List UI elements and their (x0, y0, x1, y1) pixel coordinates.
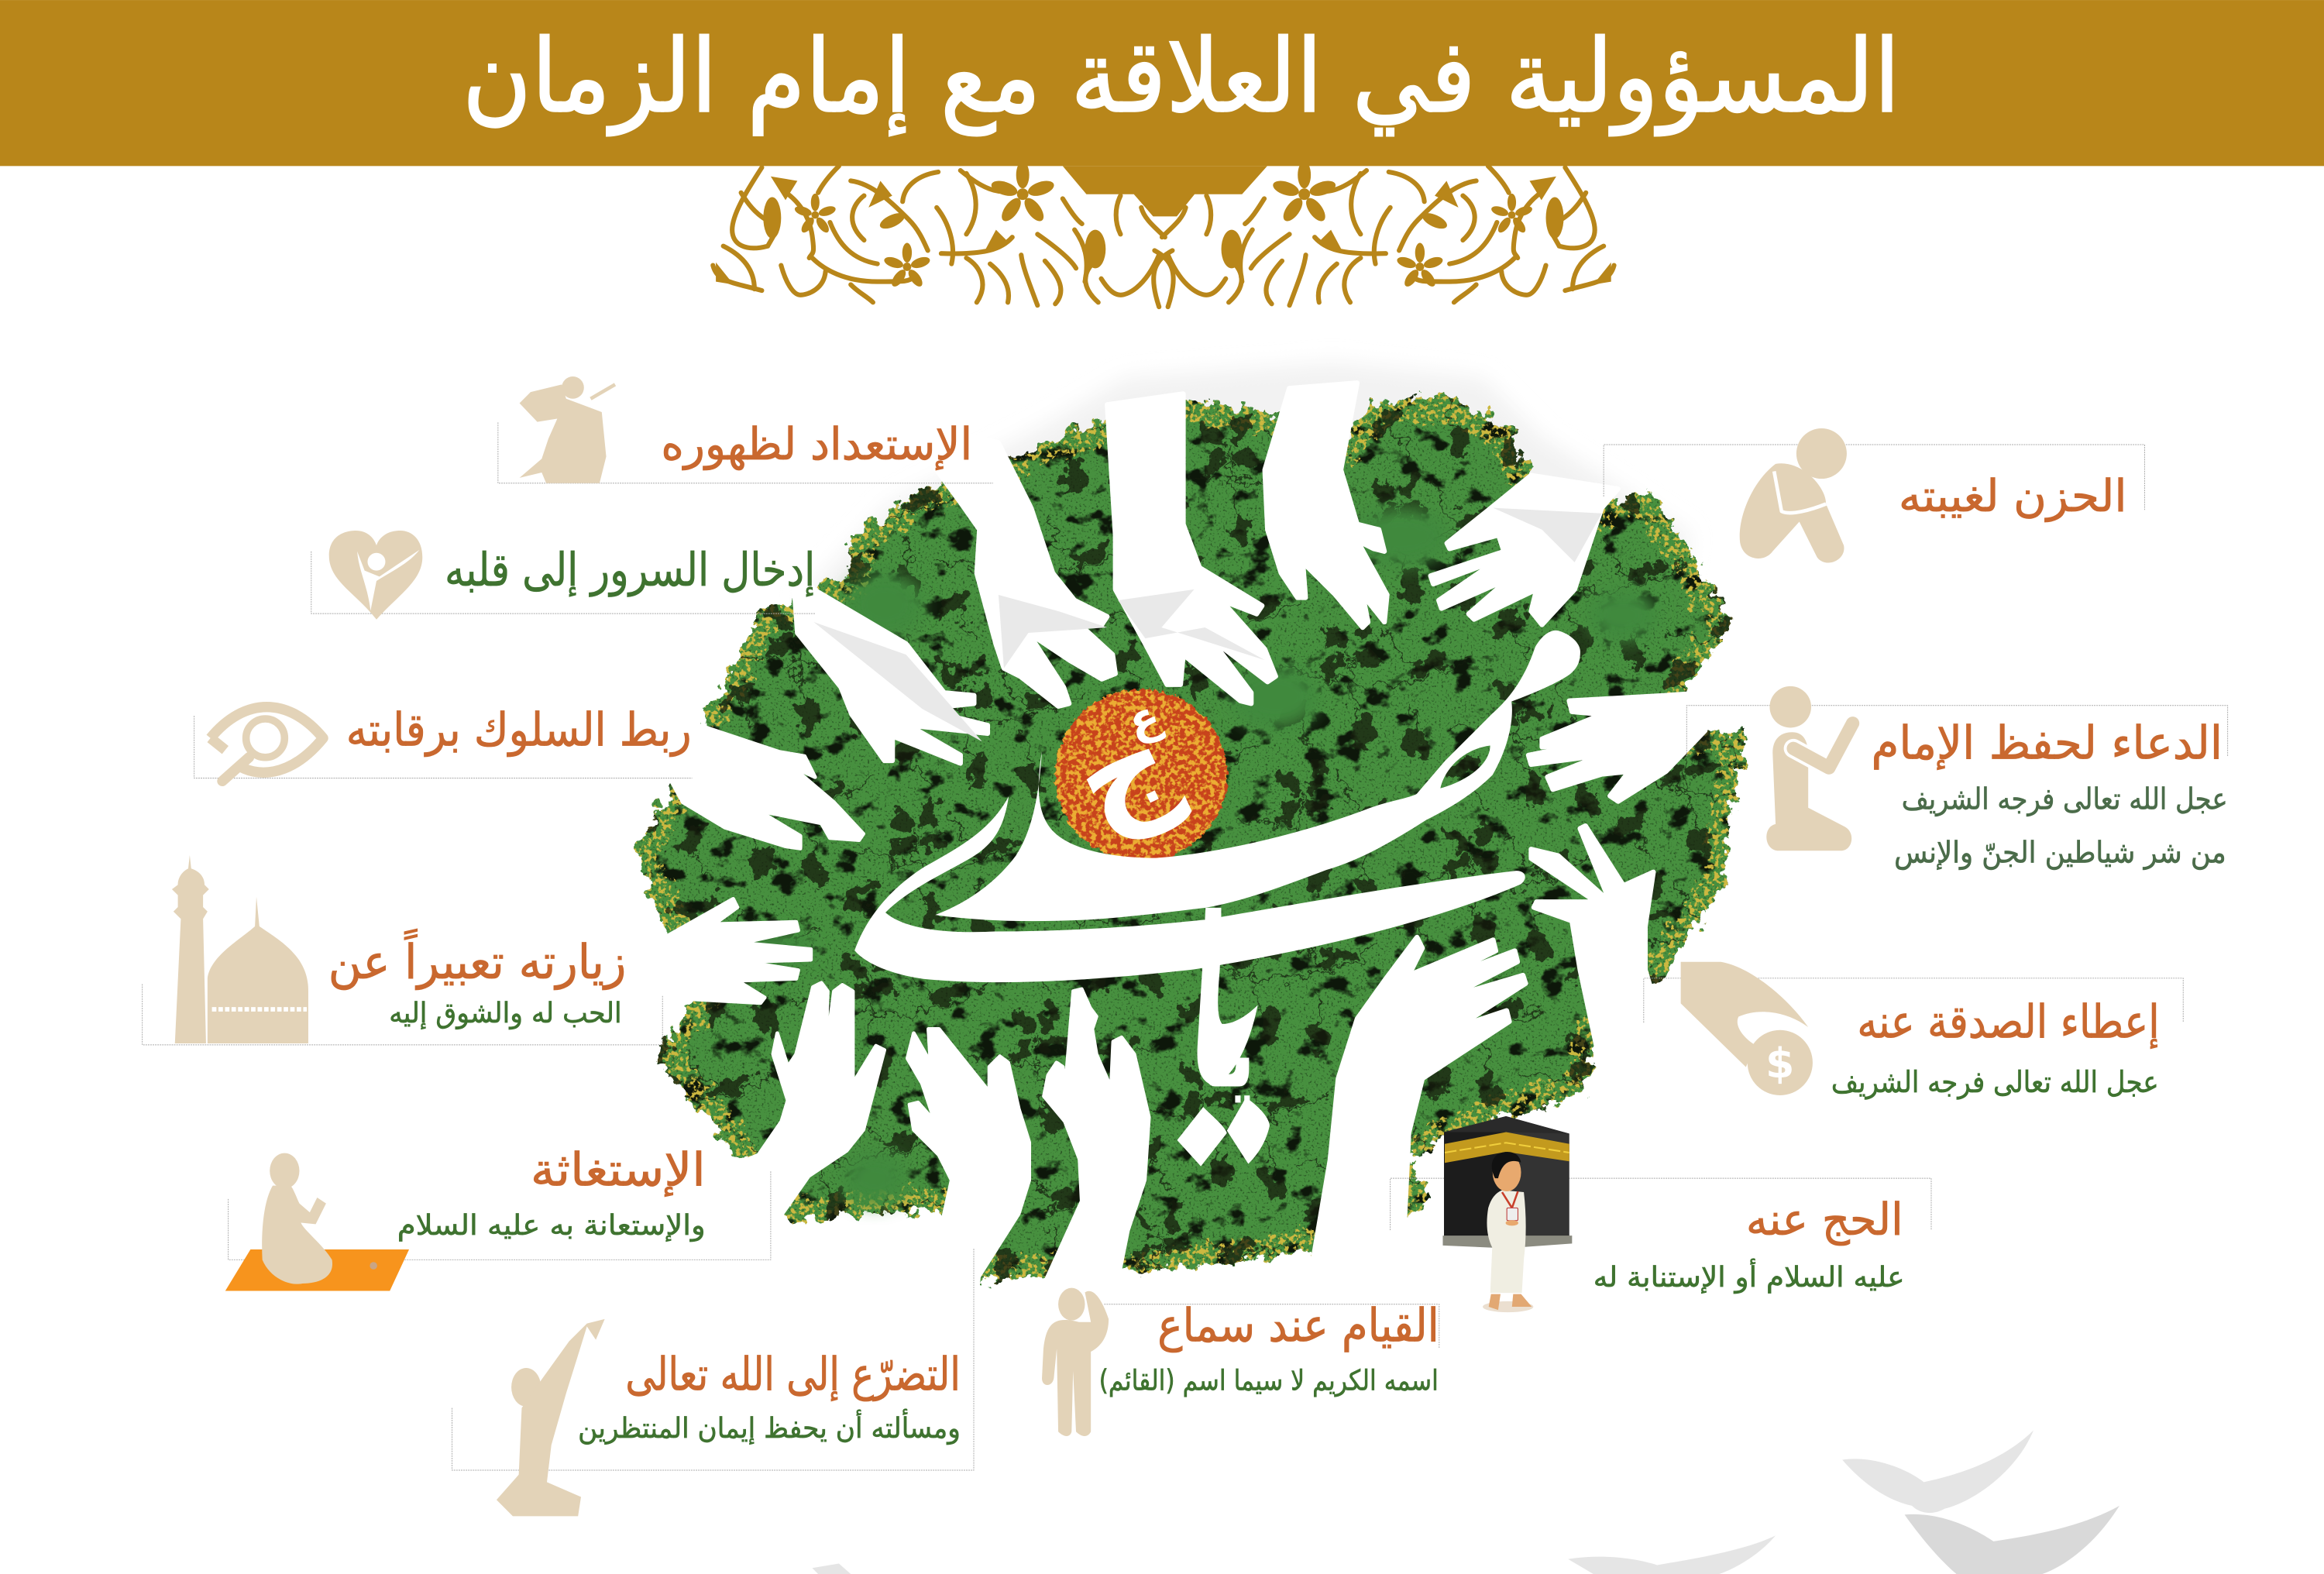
icon: kaaba (1442, 1116, 1572, 1248)
heading: الإستعداد لظهوره (661, 418, 972, 471)
icon: pilgrim (1483, 1152, 1533, 1312)
icon: figure with raised arms (497, 1319, 605, 1516)
green foliage blob (634, 394, 1746, 1279)
heading: الإستغاثة (531, 1143, 706, 1198)
panel: charity (1644, 962, 2183, 1100)
hand 3 (1265, 383, 1387, 627)
mist and doves (800, 363, 1690, 667)
panel: readiness (498, 376, 993, 483)
subtext line 2: من شر شياطين الجنّ والإنس (1894, 836, 2226, 871)
central illustration: foliage, hands and calligraphy (620, 363, 1746, 1297)
title banner (0, 0, 2324, 216)
panel: linking conduct (194, 703, 692, 781)
icon: standing man (1042, 1288, 1109, 1436)
subtext: عجل الله تعالى فرجه الشريف (1831, 1065, 2159, 1100)
bottom doves (812, 1430, 2119, 1574)
word: ya: يا (1199, 995, 1256, 1109)
icon: hand with coin: $ (1765, 1039, 1794, 1088)
icon: eye with magnifier (211, 707, 323, 781)
panel: standing up (1042, 1288, 1439, 1436)
word: mahdi: مهدي (1133, 851, 1238, 912)
reaching hands, lower left group (620, 718, 1149, 1297)
heading: ربط السلوك برقابته (346, 703, 692, 757)
panel: hajj (1391, 1116, 1931, 1312)
panel: bringing joy (311, 531, 815, 620)
hand 7 (1312, 937, 1525, 1269)
panel: seeking help (225, 1143, 771, 1291)
heading: القيام عند سماع (1157, 1299, 1439, 1352)
icon: prayer rug (225, 1249, 409, 1291)
subtext line 1: عجل الله تعالى فرجه الشريف (1902, 782, 2228, 817)
subtext: عليه السلام أو الإستنابة له (1593, 1259, 1905, 1294)
subtext: اسمه الكريم لا سيما اسم (القائم) (1099, 1364, 1439, 1397)
heading: الحزن لغيبته (1899, 470, 2127, 522)
hand 13 (792, 557, 988, 763)
icon: mosque (172, 855, 308, 1043)
bright green patches (727, 507, 1659, 1205)
hand 1 (901, 421, 1116, 706)
dark floral pattern (634, 394, 1746, 1279)
panel: supplication (452, 1248, 974, 1516)
hand 2 (1107, 394, 1276, 703)
panel: visiting (143, 855, 662, 1045)
floral ornament (713, 161, 1614, 307)
orange medallion (1055, 689, 1227, 861)
icon: praying man (262, 1153, 377, 1284)
dots (1177, 1107, 1227, 1167)
hand 6 (1531, 826, 1662, 1073)
hand 5 (1528, 692, 1705, 802)
subtext: والإستعانة به عليه السلام (397, 1208, 706, 1242)
reaching hands, upper group (792, 383, 1705, 1269)
icon: sad seated figure (1740, 428, 1847, 563)
icon: saluting soldier (520, 376, 615, 483)
heading: المسؤولية في العلاقة مع إمام الزمان (462, 18, 1900, 136)
yellow torn edge (634, 394, 1746, 1279)
heading: الدعاء لحفظ الإمام (1871, 717, 2223, 771)
grey dove wings over hands (813, 508, 1602, 741)
hand 9 (885, 1029, 1030, 1297)
heading: التضرّع إلى الله تعالى (625, 1348, 961, 1402)
calligraphy: ya mahdi (854, 631, 1580, 1167)
icon: hand with coin (1681, 962, 1813, 1095)
alef stroke (1198, 908, 1258, 1086)
medallion letter ayn: ع (1122, 689, 1167, 747)
heading: إدخال السرور إلى قلبه (445, 543, 815, 597)
icon: heart (329, 531, 422, 620)
medallion letter jim: ج (1049, 682, 1195, 857)
subtext: ومسألته أن يحفظ إيمان المنتظرين (578, 1409, 961, 1445)
heading: الحج عنه (1746, 1194, 1903, 1246)
hand 8 (1040, 989, 1149, 1294)
subtext: الحب له والشوق إليه (389, 996, 622, 1029)
hand 12 (670, 718, 864, 848)
hand 11 (620, 899, 811, 1003)
icon: kneeling figure (1766, 686, 1853, 851)
heading: إعطاء الصدقة عنه (1857, 995, 2160, 1049)
upper diagonal stroke (935, 631, 1580, 921)
hand 4 (1431, 476, 1618, 625)
panel: sorrow (1604, 428, 2144, 563)
heading: زيارته تعبيراً عن (328, 928, 626, 990)
panel: prayer for the imam (1686, 686, 2228, 871)
hand 10 (704, 983, 885, 1243)
yaa tail swash (854, 796, 1525, 982)
